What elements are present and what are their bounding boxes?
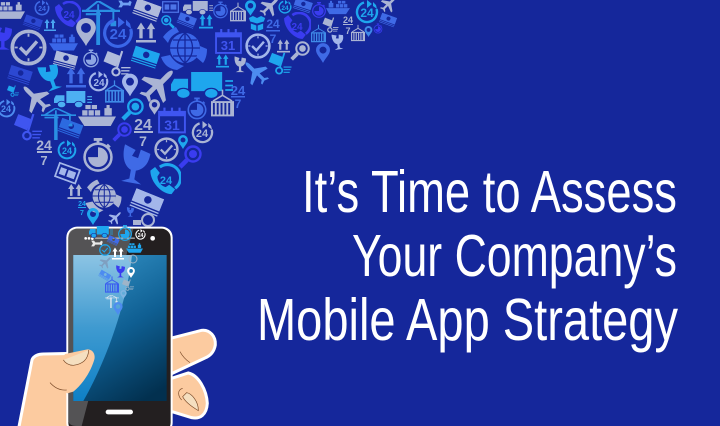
phone body: [68, 229, 171, 426]
icon: 24/7: [36, 137, 52, 168]
icon: stopwatch: [119, 225, 131, 240]
phone frame: [66, 227, 173, 426]
icon: fragile: [235, 56, 246, 72]
icon: pin: [76, 18, 96, 46]
icon: card: [162, 1, 179, 13]
icon: money: [177, 12, 197, 29]
icons flowing out of phone: [89, 225, 145, 315]
body gloss: [68, 229, 133, 426]
icon: 24/7: 7: [139, 133, 147, 149]
hand: thumb: [50, 349, 95, 393]
icon: search: [292, 42, 309, 59]
camera: [150, 236, 155, 241]
icon: 24 ring: 24: [1, 104, 11, 114]
icon: dolly: [104, 51, 130, 75]
icon: 24/7: 7: [235, 97, 242, 111]
icon: calendar 31: 31: [221, 38, 235, 53]
icon: dolly: [122, 279, 134, 290]
icon: dolly: [7, 85, 19, 96]
icon: crate: [211, 90, 234, 116]
icon: plane: [380, 0, 396, 13]
icon: pin: [316, 43, 330, 63]
icon: pin: [120, 290, 127, 299]
icon: arrows: [136, 22, 156, 42]
icon: money: [107, 235, 120, 246]
icon: small flower: [127, 207, 134, 217]
icon: 24 ring: 24: [281, 5, 289, 12]
icon: calendar 31: [216, 29, 241, 53]
icon: globe: [86, 180, 122, 213]
icon: money: [131, 46, 160, 69]
icon: ship: [126, 243, 143, 253]
icon: 24/7: [266, 17, 280, 46]
icon: money: [132, 0, 162, 22]
icon: 24 ring: [35, 0, 49, 15]
icon: stopwatch: [374, 24, 382, 33]
icon: stopwatch: [214, 2, 227, 18]
icon: pin: [127, 267, 135, 278]
icon: 24/7: [231, 83, 246, 111]
icon: crate: [105, 80, 124, 103]
icon: 24/7: 24: [231, 83, 246, 98]
icon: crate: [105, 276, 119, 293]
icon: 24/7: 24: [78, 201, 86, 208]
icon: 24 ring: 24: [138, 233, 143, 239]
icon: fragile: [0, 26, 12, 50]
icon: pin: [178, 135, 188, 149]
hand: lower finger: [167, 373, 207, 418]
icon: 24 phone: 24: [291, 22, 303, 33]
icon: ship: [78, 105, 116, 126]
icon: 24 ring: 24: [93, 78, 105, 89]
icon: truck: [183, 1, 213, 15]
icon: clock: [12, 31, 45, 64]
icon: fragile: [331, 33, 345, 50]
icon: plane: [24, 86, 51, 113]
icon: calendar 31: 31: [164, 117, 180, 133]
icon: money: [379, 13, 397, 27]
icon: 24 phone: [55, 2, 81, 27]
icon: fragile: [37, 61, 65, 92]
icon: crate: [351, 25, 365, 41]
icon: pin: [113, 302, 123, 315]
icon: search: [180, 146, 200, 167]
icon: ship: [326, 1, 350, 14]
icon: crate: [230, 3, 246, 21]
icon: crane: [82, 1, 120, 45]
icon: dolly: [322, 18, 338, 32]
icon: pin: [149, 99, 160, 115]
screen gloss: [73, 255, 132, 401]
icon: small crate: [133, 220, 141, 225]
icon: 24/7: 24: [343, 15, 353, 25]
icon: 24 ring: 24: [196, 128, 209, 140]
icon: crane: [105, 295, 119, 308]
icon: truck: [171, 72, 233, 98]
icon: stopwatch: [188, 98, 206, 119]
icon: arrows: [277, 40, 290, 52]
icon: 24 ring: [193, 121, 212, 142]
icon: 24/7: 24: [36, 137, 52, 153]
icon: truck: [54, 91, 92, 108]
icon: arrows: [68, 184, 82, 199]
icon: search: [114, 123, 131, 140]
icon: clock: [100, 245, 110, 255]
icon: wrench: [91, 241, 103, 246]
icon: ship: [49, 34, 78, 51]
icon: clock: [156, 139, 177, 160]
icon: 24/7: 24: [134, 117, 152, 134]
icon: arrows: [216, 54, 229, 68]
icon: clock: [247, 35, 269, 57]
icon: money: [23, 14, 43, 31]
hand and phone illustration: [19, 227, 215, 426]
icon: fragile: [116, 265, 125, 277]
hand: skin creases and nail: [50, 350, 198, 411]
icon: dolly: [14, 114, 42, 139]
icon: 24 ring: [0, 99, 14, 116]
hand: upper finger: [167, 330, 215, 376]
icon: arrows: [112, 248, 124, 260]
icon: arrows: [199, 14, 213, 28]
icon: 24 phone: [284, 13, 311, 39]
home button: [106, 410, 133, 414]
icon: money: [7, 65, 33, 85]
icon: arrows: [44, 19, 56, 31]
icon: 24 ring: 24: [62, 146, 72, 156]
icon: arrows: [66, 68, 86, 88]
phone screen: [73, 255, 167, 401]
icon: 24/7: 24: [266, 17, 280, 31]
title: [257, 159, 678, 353]
icon: card: [54, 162, 81, 185]
icon: 24/7: 7: [270, 32, 277, 46]
icon: crane: [41, 108, 76, 140]
icon: stopwatch: [85, 138, 111, 171]
icon: stopwatch: [313, 2, 325, 17]
icon: 24 ring: [357, 0, 377, 22]
icon: 24/7: 7: [80, 210, 84, 217]
speaker dots: [84, 237, 135, 240]
icon: money: [58, 118, 83, 139]
icon: 24 phone: 24: [63, 10, 75, 21]
icon: plane: [108, 212, 121, 225]
icon: 24 ring: [90, 71, 107, 90]
icon: 24/7: [78, 201, 86, 217]
icon: 24 phone: [150, 165, 181, 194]
icon: money: [129, 188, 164, 217]
icon: 24/7: 7: [40, 153, 48, 168]
icon: plane: [140, 71, 173, 103]
icon: 24/7: [343, 15, 353, 36]
icon cloud: [0, 0, 397, 226]
icon: dolly: [268, 53, 292, 74]
icon: ship: [0, 2, 25, 19]
icon: small ring: [142, 214, 154, 226]
icon: 24 ring: 24: [360, 6, 374, 20]
icon: 24 ring: [129, 255, 137, 263]
icon: 24 ring: [279, 0, 291, 13]
icon: pin: [365, 26, 372, 37]
icon: money: [53, 50, 78, 70]
icon: 24 ring: 24: [38, 6, 46, 13]
icon: plane: [99, 257, 111, 269]
icon: 24 ring: [59, 140, 75, 158]
icon: box: [249, 16, 265, 31]
icon: 24 phone: 24: [160, 175, 173, 187]
icon: fragile: [118, 144, 151, 185]
icon: globe: [161, 27, 207, 70]
icon: money: [293, 0, 313, 13]
icon: crate: [311, 25, 326, 42]
icon: search: [123, 99, 143, 119]
icon: plane: [260, 0, 278, 16]
icon: stopwatch: [84, 50, 98, 67]
icon: money: [98, 270, 111, 281]
hand: palm behind phone: [19, 353, 77, 426]
icon: 24 ring: [105, 17, 131, 46]
icon: plane: [245, 62, 269, 85]
icon: pin: [245, 0, 256, 16]
icon: 24/7: [134, 117, 153, 149]
icon: truck: [89, 226, 113, 238]
icon: wrench: [118, 1, 132, 7]
icon: search: [162, 16, 174, 28]
icon: 24 ring: 24: [110, 26, 127, 43]
icon: calendar 31: [159, 108, 185, 133]
icon: pin: [122, 74, 138, 96]
icon: 24/7: 7: [345, 26, 351, 36]
icon: pin: [87, 208, 99, 225]
